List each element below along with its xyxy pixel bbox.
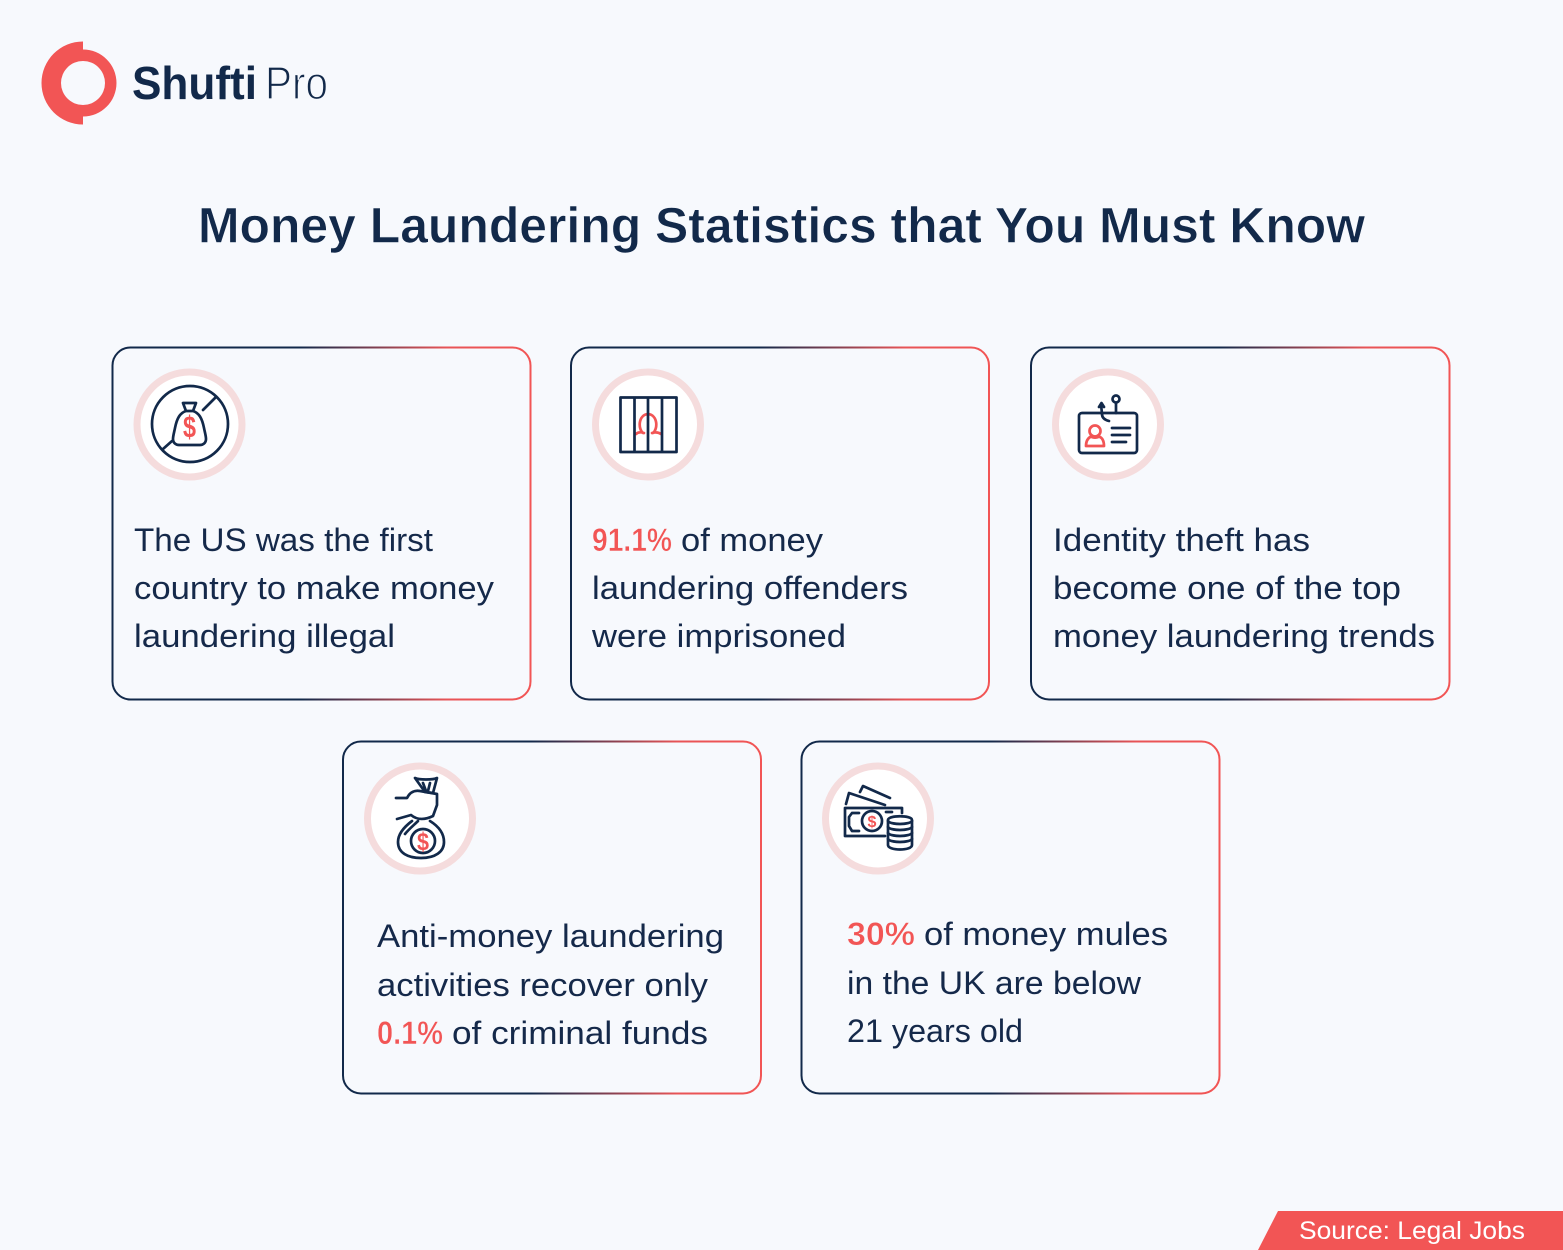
- text block: [134, 522, 494, 654]
- icon: banned money bag: $: [183, 409, 196, 444]
- text block: country to make money: [134, 570, 494, 606]
- logo mark: [41, 42, 116, 124]
- text block: activities recover only: [377, 967, 708, 1003]
- text block: of money: [681, 522, 823, 558]
- logo wordmark: Shufti: [132, 57, 257, 109]
- panel: identity theft: [1031, 348, 1450, 700]
- icon: cash and coins: [826, 766, 930, 871]
- text block: of criminal funds: [452, 1015, 708, 1051]
- text block: 30%: [847, 916, 915, 952]
- panel: imprisoned offenders: [571, 348, 989, 700]
- text block: money laundering trends: [1053, 618, 1435, 654]
- text block: 0.1%: [377, 1015, 443, 1051]
- text block: were imprisoned: [591, 618, 846, 654]
- text block: laundering offenders: [592, 570, 908, 606]
- text block: Anti-money laundering: [377, 918, 724, 954]
- logo: Shufti Pro: [41, 42, 257, 124]
- text block: Identity theft has: [1053, 522, 1310, 558]
- text block: [1053, 522, 1435, 654]
- icon: banned money bag: [137, 372, 242, 477]
- icon: person behind bars: [596, 372, 700, 477]
- icon: hand holding money bag: $: [417, 828, 429, 856]
- text block: become one of the top: [1053, 570, 1401, 606]
- text block: laundering illegal: [134, 618, 395, 654]
- text block: of money mules: [924, 916, 1168, 952]
- panel: first country: [112, 348, 530, 700]
- title: Money Laundering Statistics that You Must Know: [198, 198, 1365, 254]
- text block: 21 years old: [847, 1013, 1023, 1049]
- text block: [591, 522, 908, 654]
- text block: 91.1%: [592, 522, 672, 558]
- text block: [847, 916, 1168, 1049]
- icon: hooked ID card: [1056, 372, 1160, 477]
- source banner: Source: Legal Jobs: [1299, 1217, 1525, 1245]
- icon: hand holding money bag: [368, 766, 472, 871]
- text block: in the UK are below: [847, 965, 1142, 1001]
- source banner: [1258, 1211, 1563, 1250]
- text block: [377, 918, 724, 1051]
- icon: cash and coins: $: [868, 814, 877, 831]
- panel: young money mules: [802, 742, 1220, 1094]
- panel: recovered funds: [343, 742, 761, 1094]
- text block: The US was the first: [134, 522, 433, 558]
- logo wordmark: Pro: Pro: [265, 57, 328, 109]
